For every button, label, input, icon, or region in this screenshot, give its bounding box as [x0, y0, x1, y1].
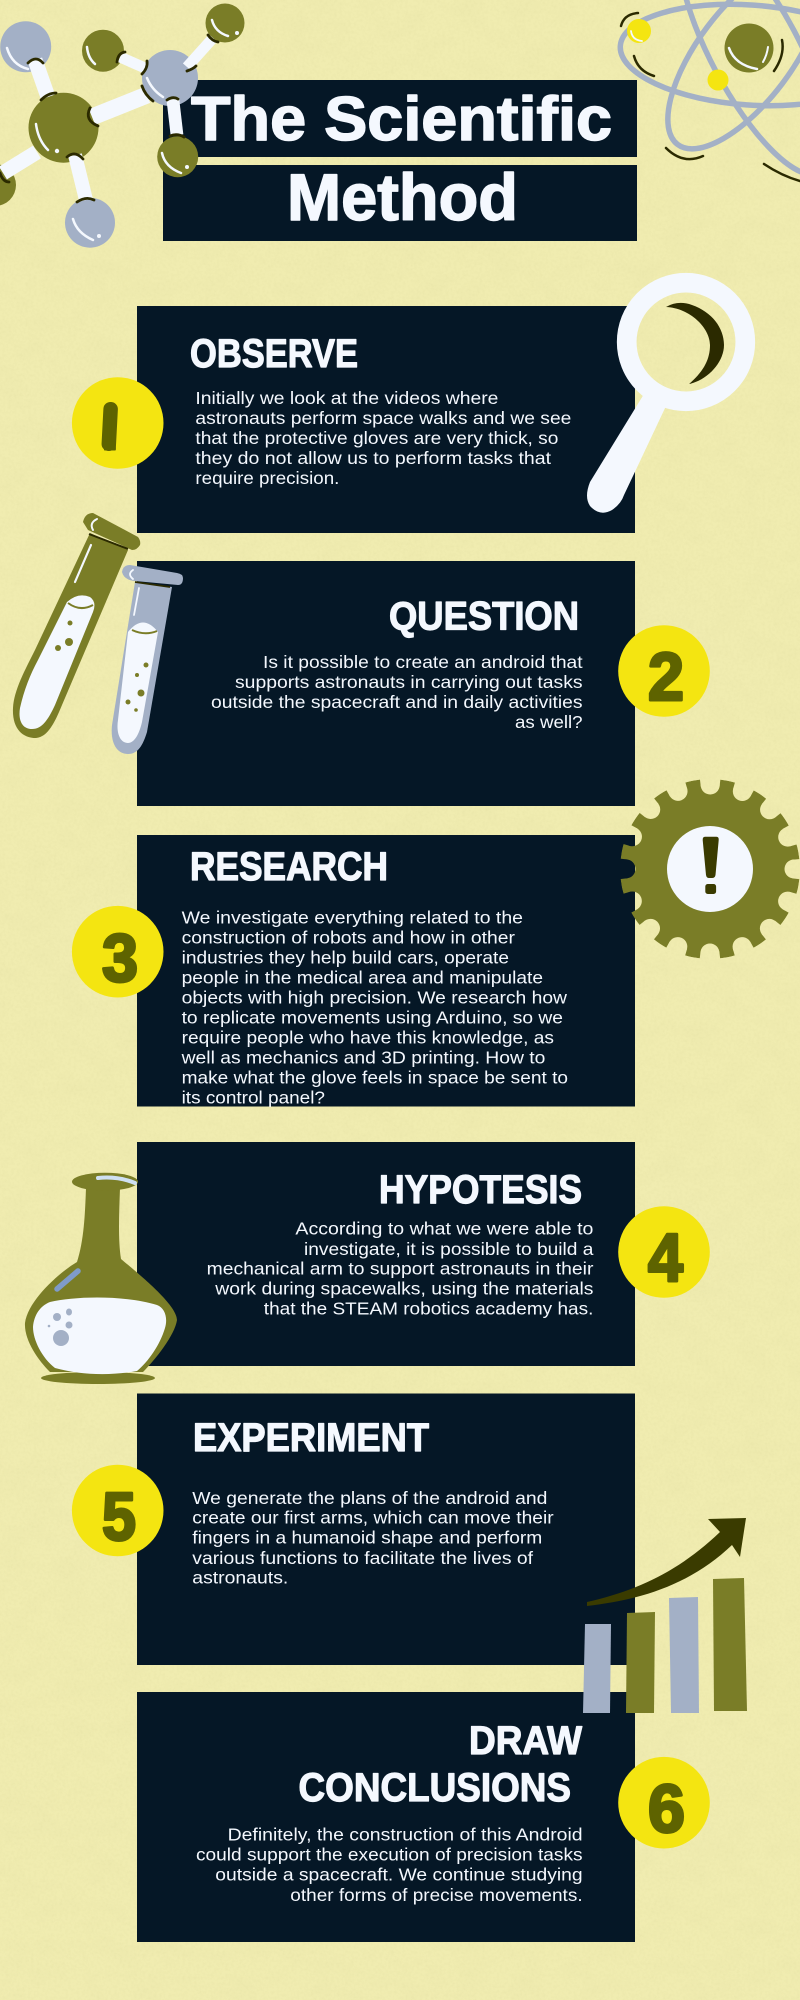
heading: draw conclusions: DRAW	[469, 1719, 582, 1763]
heading: observe: OBSERVE	[190, 332, 358, 376]
text: experiment body: astronauts.	[192, 1568, 288, 1588]
badge: step 1	[72, 377, 164, 469]
text: observe body: Initially we look at the videos where	[195, 388, 498, 408]
text: observe body	[195, 388, 571, 488]
text: research body	[180, 907, 568, 1107]
icon: molecule	[0, 4, 244, 248]
text: question body: as well?	[515, 712, 583, 732]
badge: step 5: 5	[102, 1479, 136, 1555]
arrow: upward trend	[587, 1518, 746, 1606]
title	[163, 80, 637, 241]
badge: step 3	[72, 906, 164, 998]
badge: step 2	[618, 625, 710, 717]
text: question body: Is it possible to create an android that	[263, 652, 583, 672]
text: research body: require people who have this knowledge, as	[182, 1028, 554, 1048]
text: research body: its control panel?	[182, 1087, 325, 1107]
text: observe body: that the protective gloves are very thick, so	[195, 428, 558, 448]
text: research body: objects with high precision. We research how	[182, 988, 568, 1008]
heading: draw conclusions: CONCLUSIONS	[298, 1766, 571, 1810]
panel: hypotesis	[137, 1142, 635, 1366]
panel: draw conclusions	[137, 1692, 635, 1942]
heading: research: RESEARCH	[190, 845, 388, 889]
heading: question: QUESTION	[389, 594, 579, 638]
icon: gear with exclamation mark	[620, 779, 800, 959]
badge: step 3: 3	[102, 920, 138, 996]
text: hypotesis body: that the STEAM robotics academy has.	[264, 1298, 593, 1318]
text: hypotesis body: work during spacewalks, using the materials	[214, 1279, 593, 1299]
heading: draw conclusions	[298, 1719, 582, 1810]
badge: step 6	[618, 1757, 710, 1848]
badge: step 6: 6	[648, 1771, 685, 1847]
text: observe body: astronauts perform space walks and we see	[195, 408, 571, 428]
title: The Scientific	[191, 85, 612, 154]
text: experiment body: fingers in a humanoid shape and perform	[192, 1528, 542, 1548]
text: hypotesis body: mechanical arm to support astronauts in their	[207, 1259, 594, 1279]
text: research body: industries they help build cars, operate	[182, 948, 509, 968]
badge: step 2: 2	[648, 639, 684, 715]
text: research body: to replicate movements using Arduino, so we	[182, 1008, 563, 1028]
text: conclusions body: outside a spacecraft. We continue studying	[215, 1865, 583, 1885]
heading: hypotesis: HYPOTESIS	[379, 1168, 582, 1212]
text: hypotesis body: According to what we were able to	[295, 1219, 593, 1239]
panel: observe	[137, 306, 635, 533]
panel: research	[137, 835, 635, 1107]
badge: step 4: 4	[648, 1220, 683, 1296]
text: conclusions body: could support the execution of precision tasks	[196, 1844, 583, 1864]
text: question body: supports astronauts in carrying out tasks	[235, 672, 583, 692]
icon: flask	[25, 1173, 177, 1384]
text: question body: outside the spacecraft and in daily activities	[211, 692, 583, 712]
text: conclusions body: other forms of precise movements.	[290, 1885, 583, 1905]
text: experiment body: various functions to facilitate the lives of	[192, 1548, 533, 1568]
text: research body: make what the glove feels in space be sent to	[182, 1068, 568, 1088]
text: conclusions body: Definitely, the construction of this Android	[228, 1825, 583, 1845]
text: conclusions body	[196, 1825, 583, 1905]
icon: slate test tube	[112, 565, 183, 754]
text: question body	[211, 652, 583, 732]
panel: experiment	[137, 1394, 635, 1665]
text: research body: people in the medical area and manipulate	[182, 968, 543, 988]
icon: olive test tube	[13, 513, 140, 738]
text: observe body: require precision.	[195, 468, 339, 488]
badge: step 1: 1	[103, 394, 116, 463]
text: research body: well as mechanics and 3D printing. How to	[180, 1047, 545, 1067]
text: hypotesis body	[207, 1219, 594, 1318]
badge: step 5	[72, 1465, 164, 1556]
panel: question	[137, 561, 635, 806]
text: experiment body: create our first arms, which can move their	[192, 1508, 554, 1528]
badge: step 4	[618, 1206, 710, 1298]
text: experiment body: We generate the plans of the android and	[192, 1488, 547, 1508]
text: observe body: they do not allow us to perform tasks that	[195, 448, 551, 468]
text: hypotesis body: investigate, it is possible to build a	[304, 1239, 594, 1259]
heading: experiment: EXPERIMENT	[193, 1416, 429, 1460]
icon: magnifying glass	[587, 283, 745, 513]
text: experiment body	[192, 1488, 554, 1588]
text: research body: We investigate everything related to the	[182, 907, 523, 927]
title: Method	[287, 160, 518, 234]
icon: atom	[617, 0, 800, 194]
chart: rising bars with arrow	[583, 1518, 747, 1713]
text: research body: construction of robots and how in other	[182, 928, 515, 948]
